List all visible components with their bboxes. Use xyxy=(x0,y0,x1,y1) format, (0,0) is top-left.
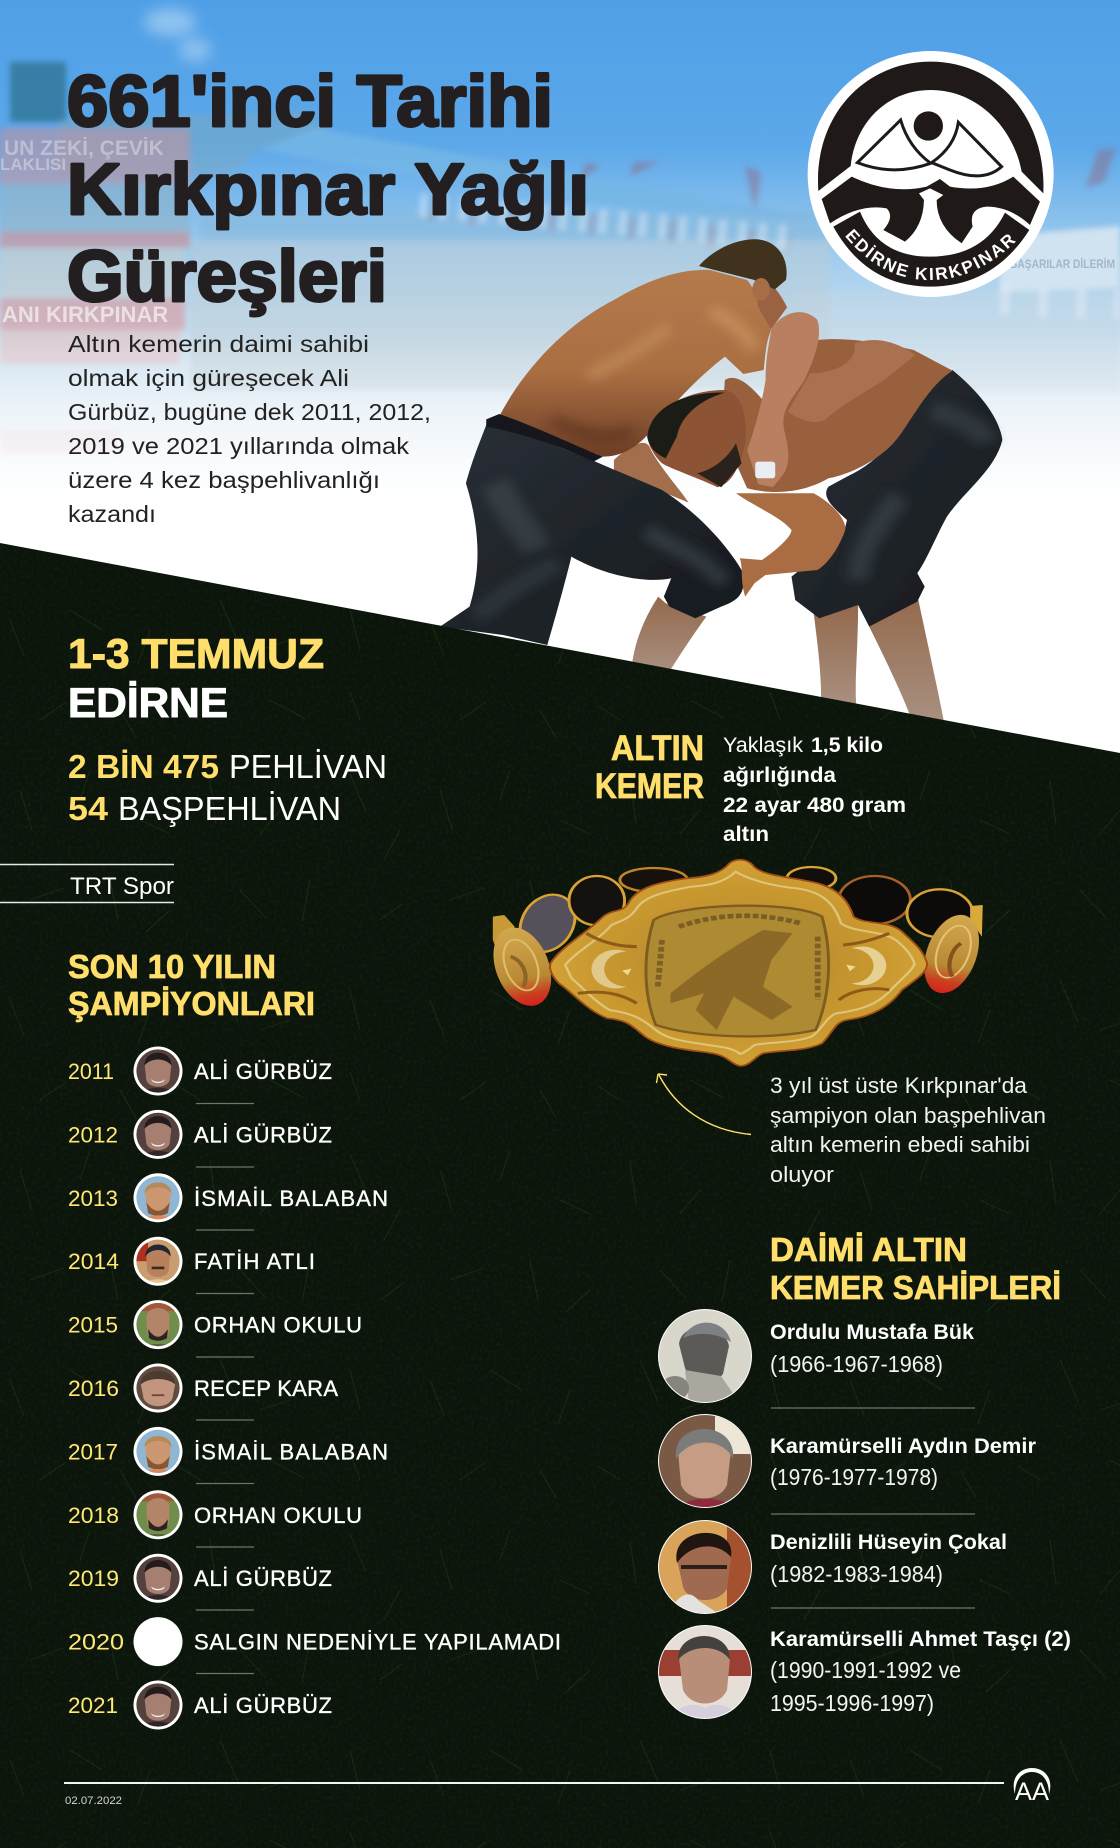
background: sky xyxy=(0,0,1120,800)
holder: Mustafa Bük: (1966-1967-1968) xyxy=(770,1351,943,1377)
row 2020 xyxy=(68,1617,561,1666)
row 2021: 2021 xyxy=(68,1693,118,1718)
heading: golden belt: KEMER xyxy=(595,767,704,806)
row 2018: 2018 xyxy=(68,1503,119,1528)
wrestler statistics: 54 xyxy=(68,790,109,827)
title: Güreşleri xyxy=(67,237,387,317)
date: 02.07.2022 xyxy=(65,1795,122,1807)
event date and place: EDİRNE xyxy=(68,679,228,726)
row 2011 xyxy=(68,1046,332,1096)
heading: permanent belt holders: KEMER SAHİPLERİ xyxy=(770,1269,1061,1306)
wrestler B head xyxy=(647,390,746,487)
wrestler B trousers xyxy=(792,370,1002,627)
heading: champions of last 10 years: ŞAMPİYONLARI xyxy=(68,985,315,1022)
icon: Anadolu Agency logo xyxy=(1014,1768,1050,1806)
row 2013: İSMAİL BALABAN xyxy=(194,1186,388,1211)
row 2011: 2011 xyxy=(68,1059,114,1084)
row 2011: ALİ GÜRBÜZ xyxy=(194,1059,332,1084)
row 2014 xyxy=(68,1237,315,1286)
golden belt facts: Yaklaşık xyxy=(723,733,803,757)
row 2016: 2016 xyxy=(68,1376,119,1401)
intro paragraph: Gürbüz, bugüne dek 2011, 2012, xyxy=(68,399,431,425)
wrestler statistics: PEHLİVAN xyxy=(229,748,387,785)
golden belt facts: ağırlığında xyxy=(723,763,837,787)
logo: Edirne Kırkpınar emblem: EDİRNE KIRKPINAR xyxy=(845,228,1016,280)
holder: Hüseyin Çokal xyxy=(658,1520,1007,1614)
wrestler statistics: BAŞPEHLİVAN xyxy=(118,790,341,827)
golden belt facts xyxy=(723,733,906,846)
wrestler A front arm xyxy=(747,312,819,487)
wrestler statistics: 2 BİN 475 xyxy=(68,748,219,785)
background: faded stadium photo xyxy=(0,8,1120,540)
row 2019 xyxy=(68,1554,332,1603)
background: faded stadium photo: ANI KIRKPINAR xyxy=(2,302,168,327)
heading: champions of last 10 years: SON 10 YILIN xyxy=(68,948,276,985)
golden belt facts: altın xyxy=(723,822,769,846)
belt rule note: altın kemerin ebedi sahibi xyxy=(770,1132,1030,1157)
wrestler B torso xyxy=(721,339,952,492)
intro paragraph: Altın kemerin daimi sahibi xyxy=(68,331,369,357)
heading: champions of last 10 years xyxy=(68,948,315,1022)
row 2013: 2013 xyxy=(68,1186,118,1211)
belt velvet segments xyxy=(493,867,983,958)
row 2018 xyxy=(68,1490,362,1539)
belt side medallions xyxy=(484,910,988,1011)
heading: permanent belt holders: DAİMİ ALTIN xyxy=(770,1231,967,1268)
row 2012: 2012 xyxy=(68,1122,118,1147)
row 2016: RECEP KARA xyxy=(194,1376,338,1401)
icon: Anadolu Agency logo: AA xyxy=(1015,1778,1049,1806)
row 2017: 2017 xyxy=(68,1439,118,1464)
footer line xyxy=(64,1782,1004,1784)
background: faded stadium photo: UN ZEKİ, ÇEVİK xyxy=(4,137,164,160)
arrow to belt xyxy=(656,1074,751,1134)
wrestler A trousers xyxy=(440,420,744,645)
heading: golden belt xyxy=(595,729,704,806)
holder: Aydın Demir xyxy=(658,1414,1037,1508)
broadcaster: TRT Spor xyxy=(0,864,174,902)
wrestler statistics xyxy=(68,748,387,827)
holder: Ahmet Taşçı: (1990-1991-1992 ve xyxy=(770,1657,961,1683)
row 2017: İSMAİL BALABAN xyxy=(194,1439,388,1464)
row 2015: ORHAN OKULU xyxy=(194,1313,362,1338)
background: faded stadium photo: LAKLISI xyxy=(0,155,66,174)
holder: Aydın Demir: Karamürselli Aydın Demir xyxy=(770,1434,1037,1458)
photo: two wrestlers grappling xyxy=(440,239,1002,722)
row 2014: FATİH ATLI xyxy=(194,1249,315,1274)
belt rule note xyxy=(770,1073,1046,1187)
holder: Aydın Demir: (1976-1977-1978) xyxy=(770,1464,938,1490)
row 2012: ALİ GÜRBÜZ xyxy=(194,1122,332,1147)
heading: golden belt: ALTIN xyxy=(611,729,704,768)
wrestler A torso xyxy=(486,270,771,462)
title: Kırkpınar Yağlı xyxy=(67,150,589,230)
intro paragraph: 2019 ve 2021 yıllarında olmak xyxy=(68,433,410,459)
row 2020: SALGIN NEDENİYLE YAPILAMADI xyxy=(194,1630,561,1655)
holder: Mustafa Bük: Ordulu Mustafa Bük xyxy=(770,1320,974,1344)
intro paragraph: üzere 4 kez başpehlivanlığı xyxy=(68,467,380,493)
wrestler legs xyxy=(632,595,944,722)
broadcaster: TRT Spor: TRT Spor xyxy=(70,873,174,900)
holder: Hüseyin Çokal: (1982-1983-1984) xyxy=(770,1561,943,1587)
row 2013 xyxy=(68,1173,388,1222)
row 2012 xyxy=(68,1110,332,1159)
holder: Ahmet Taşçı: Karamürselli Ahmet Taşçı (2) xyxy=(770,1627,1071,1651)
wrestler B arm xyxy=(736,493,845,597)
row 2019: ALİ GÜRBÜZ xyxy=(194,1566,332,1591)
row 2018: ORHAN OKULU xyxy=(194,1503,362,1528)
wrestler A head xyxy=(699,239,787,329)
logo: Edirne Kırkpınar emblem xyxy=(808,51,1054,297)
row 2016 xyxy=(68,1364,338,1412)
row 2021 xyxy=(68,1680,332,1730)
holder: Ahmet Taşçı: 1995-1996-1997) xyxy=(770,1690,934,1716)
event date and place: 1-3 TEMMUZ xyxy=(68,630,324,677)
intro paragraph: olmak için güreşecek Ali xyxy=(68,365,349,391)
holder: Ahmet Taşçı xyxy=(658,1625,1071,1719)
intro paragraph xyxy=(68,331,431,527)
holder: Hüseyin Çokal: Denizlili Hüseyin Çokal xyxy=(770,1530,1007,1554)
golden belt facts: 1,5 kilo xyxy=(811,733,883,757)
row 2015 xyxy=(68,1300,362,1349)
row 2020: 2020 xyxy=(68,1630,124,1655)
belt rule note: oluyor xyxy=(770,1162,835,1187)
permanent holders list xyxy=(658,1309,1071,1719)
row 2021: ALİ GÜRBÜZ xyxy=(194,1693,332,1718)
row 2017 xyxy=(68,1427,388,1476)
photo: golden belt xyxy=(484,860,988,1066)
champions list xyxy=(68,1046,561,1730)
row 2015: 2015 xyxy=(68,1313,118,1338)
title: 661'inci Tarihi xyxy=(67,62,553,142)
holder: Mustafa Bük xyxy=(658,1309,974,1403)
belt rule note: şampiyon olan başpehlivan xyxy=(770,1103,1046,1128)
title xyxy=(67,62,589,317)
heading: permanent belt holders xyxy=(770,1231,1061,1306)
row 2019: 2019 xyxy=(68,1566,119,1591)
dark grass panel xyxy=(0,540,1120,1848)
intro paragraph: kazandı xyxy=(68,501,156,527)
wrestler A forearm on back xyxy=(788,340,915,422)
row 2014: 2014 xyxy=(68,1249,119,1274)
arm behind xyxy=(614,443,689,503)
event date and place xyxy=(68,630,324,726)
golden belt facts: 22 ayar 480 gram xyxy=(723,793,906,817)
belt rule note: 3 yıl üst üste Kırkpınar'da xyxy=(770,1073,1027,1098)
belt centre plaque xyxy=(550,860,927,1066)
